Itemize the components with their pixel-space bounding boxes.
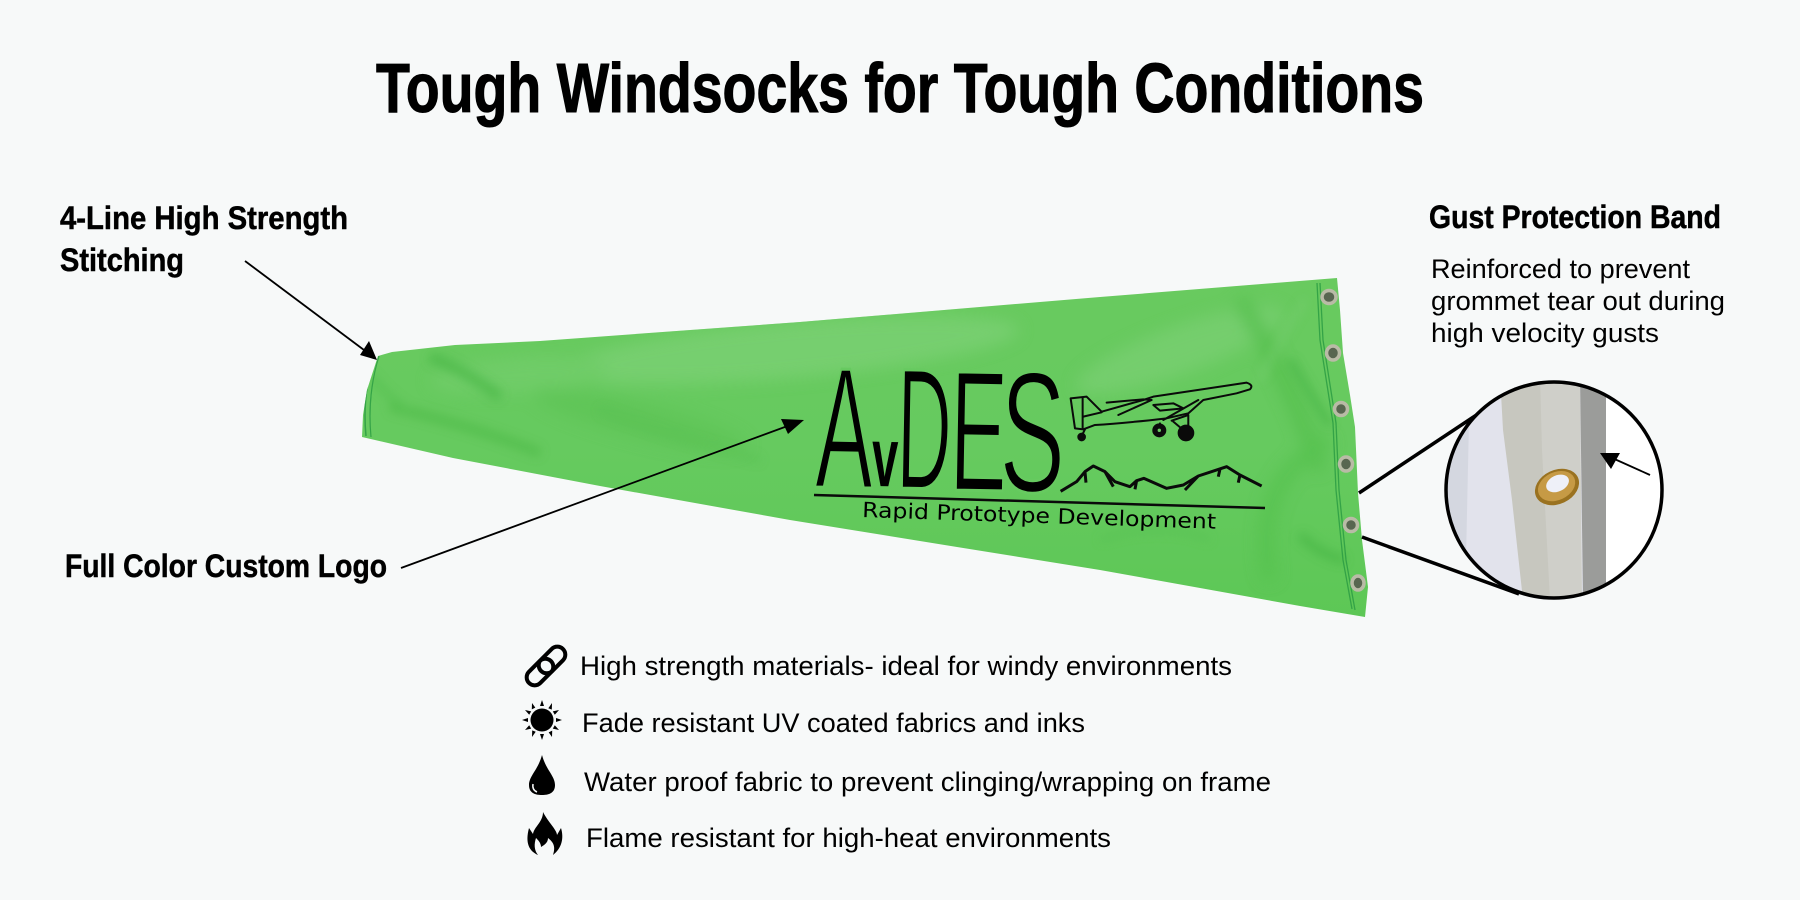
zoom connector lines bbox=[1359, 410, 1519, 594]
feature: high strength bbox=[523, 643, 1232, 689]
feature list bbox=[522, 643, 1271, 855]
logo airplane bbox=[1071, 383, 1251, 440]
callout: gust protection band: Gust Protection Band bbox=[1429, 199, 1721, 235]
brass grommet bbox=[1529, 462, 1585, 512]
logo wordmark bbox=[814, 331, 1067, 529]
icon: chain link bbox=[523, 643, 569, 689]
logo wordmark: S bbox=[998, 335, 1067, 529]
feature: water proof: Water proof fabric to prevent clinging/wrapping on frame bbox=[584, 767, 1271, 797]
logo tagline: Rapid Prototype Development bbox=[862, 498, 1216, 534]
logo wordmark: v bbox=[871, 411, 899, 505]
callout: gust protection band: Reinforced to prevent bbox=[1431, 254, 1690, 284]
title: Tough Windsocks for Tough Conditions bbox=[376, 49, 1424, 127]
callout: gust protection band: grommet tear out during bbox=[1431, 286, 1725, 316]
arrow: stitching bbox=[245, 261, 377, 360]
callout: 4-line high strength stitching: Stitching bbox=[60, 242, 184, 278]
gray protection band bbox=[1501, 384, 1550, 596]
feature: flame resistant bbox=[527, 812, 1111, 855]
callout: gust protection band: high velocity gusts bbox=[1431, 318, 1659, 348]
callout: full color custom logo: Full Color Custom Logo bbox=[65, 548, 387, 584]
stitching lines bbox=[360, 283, 1355, 610]
callout: gust protection band bbox=[1429, 199, 1725, 348]
feature: fade resistant bbox=[522, 700, 1085, 740]
printed logo bbox=[814, 331, 1265, 534]
feature: water proof bbox=[529, 755, 1271, 797]
logo wordmark: A bbox=[814, 331, 875, 525]
windsock bbox=[350, 270, 1380, 630]
detail lens: grommet close-up bbox=[1444, 380, 1664, 600]
feature: flame resistant: Flame resistant for high-heat environments bbox=[586, 823, 1111, 853]
icon: flame bbox=[527, 812, 562, 855]
logo underline bbox=[814, 495, 1265, 508]
feature: high strength: High strength materials- ideal for windy environments bbox=[580, 651, 1232, 681]
fabric wrinkles bbox=[369, 352, 1342, 562]
logo wordmark: D bbox=[895, 334, 953, 526]
arrow: band bbox=[1600, 453, 1650, 475]
sock body bbox=[350, 270, 1380, 630]
callout: 4-line high strength stitching: 4-Line High Strength bbox=[60, 200, 348, 236]
grommets bbox=[1322, 290, 1364, 590]
arrow: logo bbox=[401, 419, 804, 568]
icon: sun bbox=[522, 700, 562, 740]
logo wordmark: E bbox=[948, 334, 1009, 528]
feature: fade resistant: Fade resistant UV coated fabrics and inks bbox=[582, 708, 1085, 738]
callout: 4-line high strength stitching bbox=[60, 200, 348, 278]
logo mountains bbox=[1061, 466, 1262, 491]
icon: water drop bbox=[529, 755, 555, 795]
lens ring bbox=[1446, 382, 1662, 598]
